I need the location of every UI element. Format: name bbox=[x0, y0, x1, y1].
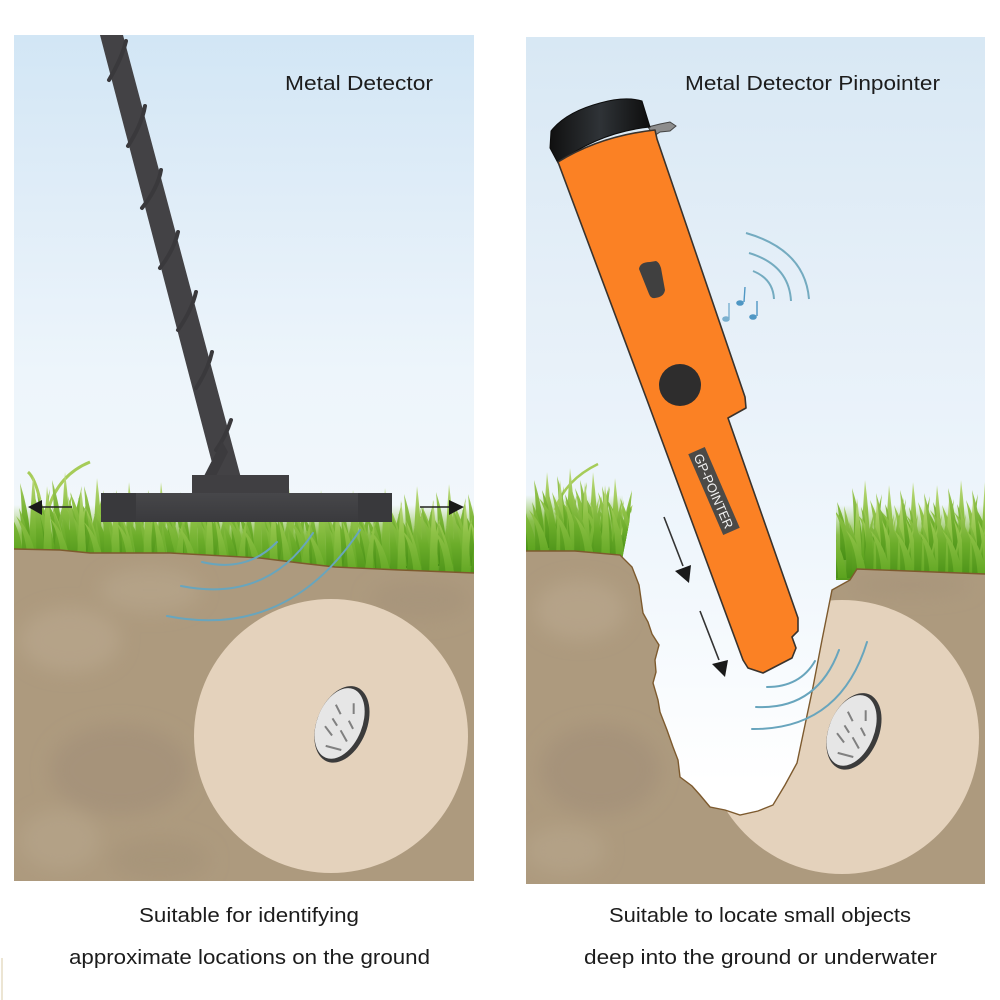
grass left of hole bbox=[526, 462, 633, 557]
caption: metal detector: Suitable for identifying bbox=[139, 905, 359, 927]
grass strip bbox=[14, 460, 474, 572]
grass right of hole bbox=[836, 480, 985, 580]
arrow down 1 bbox=[664, 517, 691, 583]
clip bbox=[648, 122, 676, 136]
soil with hole and coin cutaway bbox=[525, 545, 985, 885]
power button bbox=[659, 364, 701, 406]
label: pinpointer: Metal Detector Pinpointer bbox=[685, 73, 940, 95]
coin bbox=[304, 678, 380, 771]
search coil bbox=[101, 493, 392, 522]
sound waves bbox=[746, 233, 809, 301]
pinpointer device bbox=[550, 99, 798, 673]
coin bbox=[816, 685, 892, 778]
signal waves: pinpointer bbox=[752, 642, 867, 729]
brace bbox=[204, 441, 228, 476]
soil with coin cutaway circle bbox=[14, 540, 474, 885]
caption: pinpointer: Suitable to locate small objects bbox=[609, 905, 911, 927]
arrow left bbox=[28, 500, 72, 515]
metal detector device bbox=[100, 35, 392, 522]
sky background bbox=[526, 37, 985, 664]
caption: metal detector: approximate locations on the ground bbox=[69, 947, 430, 969]
label: metal detector: Metal Detector bbox=[285, 73, 433, 95]
arrow down 2 bbox=[700, 611, 728, 677]
sky background bbox=[14, 35, 474, 518]
panel: metal detector bbox=[14, 35, 474, 881]
caption: metal detector bbox=[69, 905, 430, 969]
shaft spiral ties bbox=[109, 41, 231, 450]
cap bbox=[550, 99, 650, 163]
brand label: GP-POINTER bbox=[691, 452, 736, 531]
signal waves: detector bbox=[167, 530, 360, 620]
panel: pinpointer bbox=[516, 37, 1000, 885]
caption: pinpointer bbox=[584, 905, 937, 969]
mode button bbox=[639, 261, 665, 298]
coil mount bbox=[192, 475, 289, 494]
music notes bbox=[722, 287, 757, 322]
shaft bbox=[100, 35, 241, 478]
body bbox=[558, 130, 798, 673]
caption: pinpointer: deep into the ground or underwater bbox=[584, 947, 937, 969]
arrow right bbox=[420, 500, 464, 515]
